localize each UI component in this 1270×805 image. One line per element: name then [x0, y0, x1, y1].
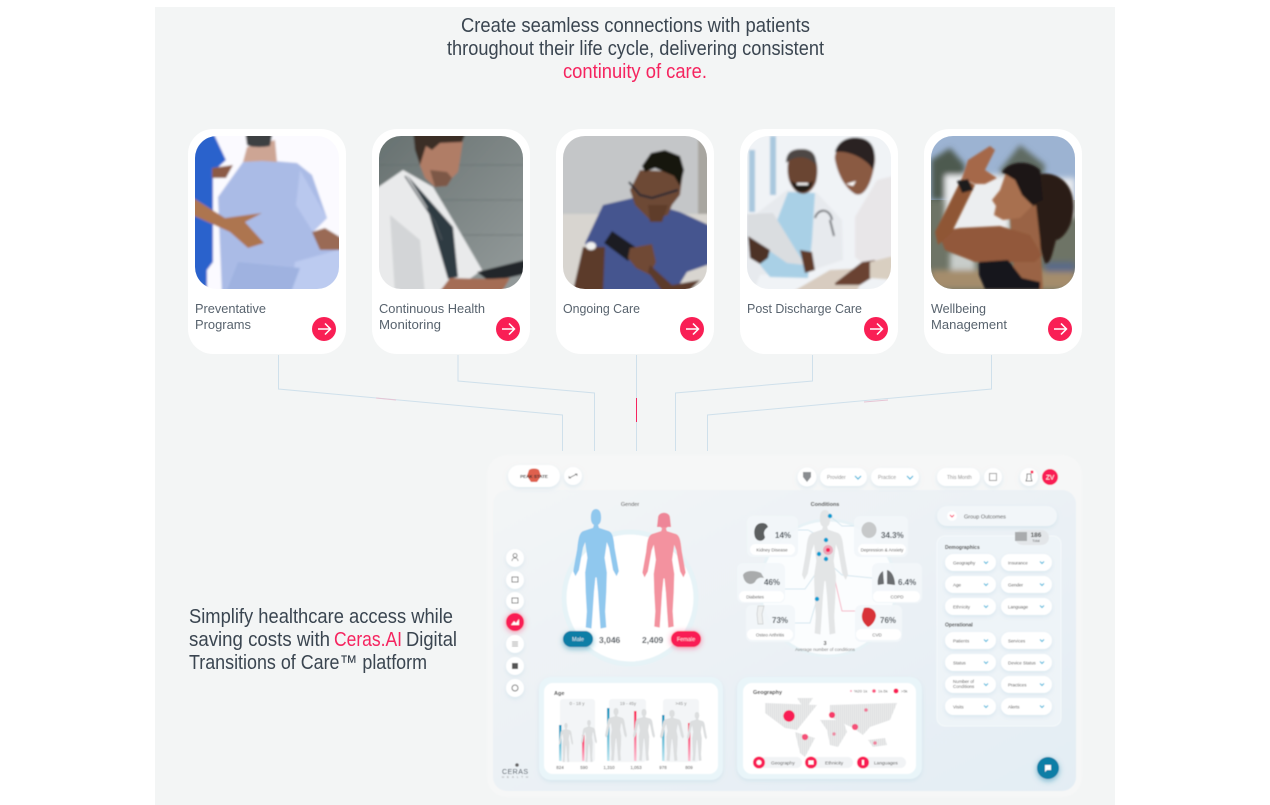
age values: 590: [580, 765, 588, 770]
COPD: [873, 570, 920, 602]
COPD: COPD: [890, 594, 904, 600]
card: ongoing care: [556, 129, 714, 354]
depression and anxiety: Depression & Anxiety: [861, 548, 904, 552]
age chart panel: 19 - 45y: [620, 701, 637, 706]
conditions chart: [737, 502, 922, 656]
average conditions: 3: [823, 641, 827, 647]
CVD: [856, 607, 901, 640]
filter labels: Visits: [953, 704, 964, 710]
heading: Create seamless connections with patients: [461, 15, 810, 37]
age values: 809: [685, 765, 693, 770]
filter labels: Services: [1008, 638, 1026, 644]
label: Management: [931, 317, 1007, 332]
CVD: 76%: [880, 616, 896, 625]
map bubbles: [783, 708, 877, 745]
connector traces: [785, 516, 872, 623]
label: Wellbeing: [931, 301, 986, 316]
marker dots: [815, 514, 833, 601]
gender chart: [563, 502, 701, 664]
filter labels: [953, 560, 1037, 710]
world map: [765, 698, 897, 757]
label: Monitoring: [379, 317, 441, 332]
card: continuous health monitoring: [372, 129, 530, 354]
top bar: [508, 465, 1058, 487]
intro text: Transitions of Care™ platform: [189, 652, 427, 674]
callout cards: [737, 516, 922, 642]
heading: [447, 15, 824, 83]
age chart panel: Age: [554, 691, 564, 697]
legend: >5k: [901, 688, 908, 694]
gender chart: Gender: [621, 502, 639, 508]
depression and anxiety: 34.3%: [881, 531, 904, 540]
filter labels: Status: [953, 660, 967, 666]
arrow button: [1048, 317, 1072, 341]
filter labels: Language: [1008, 604, 1029, 610]
osteoarthritis: Osteo Arthritis: [756, 632, 785, 638]
age values: 1,310: [603, 765, 615, 770]
map tabs: Geography: [771, 760, 795, 766]
female button and value: 2,409: [642, 635, 664, 645]
diabetes: [739, 571, 784, 602]
body figure: [802, 510, 848, 634]
intro text: [189, 606, 457, 674]
filter labels: Number of: [953, 679, 975, 684]
age values: 978: [659, 765, 667, 770]
top bar: ZV: [1046, 474, 1055, 482]
legend: [850, 688, 908, 694]
legend: %20 1k: [854, 688, 867, 694]
intro text: saving costs with: [189, 629, 330, 651]
average conditions: Average number of conditions: [795, 647, 856, 652]
legend: 1k-5k: [878, 688, 888, 694]
depression and anxiety: [858, 522, 906, 555]
total tag: [1015, 530, 1049, 545]
gender chart: Male: [572, 637, 584, 643]
filters panel: [937, 530, 1061, 726]
label: Ongoing Care: [563, 301, 640, 316]
intro text: Digital: [406, 629, 457, 651]
filters panel: Demographics: [945, 545, 980, 551]
filter labels: Gender: [1008, 582, 1024, 588]
card: post discharge care: [740, 129, 898, 354]
filter labels: Device Status: [1008, 660, 1037, 666]
age values: 1,053: [630, 765, 642, 770]
Ceras Health logo: CERAS: [502, 769, 528, 776]
total tag: 186: [1031, 532, 1042, 539]
card: wellbeing management: [924, 129, 1082, 354]
average conditions: [795, 641, 856, 652]
age chart panel: >45 y: [675, 701, 687, 706]
label: Programs: [195, 317, 251, 332]
label: Preventative: [195, 301, 266, 316]
Ceras Health logo: [502, 763, 528, 779]
map tabs: Languages: [874, 760, 898, 766]
COPD: 6.4%: [898, 578, 916, 587]
heading: continuity of care.: [563, 61, 707, 83]
photo: doctor and patient with tablet: [747, 136, 891, 289]
group outcomes header: [937, 506, 1057, 526]
chat button: [1037, 757, 1059, 779]
top bar: PEAK STATE: [520, 474, 548, 479]
male button and value: [563, 631, 593, 647]
intro text: Simplify healthcare access while: [189, 606, 453, 628]
heading: throughout their life cycle, delivering consistent: [447, 38, 824, 60]
filter chevrons: [984, 562, 1044, 708]
gender chart: 3,046: [599, 635, 621, 645]
arrow button: [312, 317, 336, 341]
age chart panel: [539, 677, 723, 780]
age values: [556, 765, 693, 770]
conditions chart: Conditions: [811, 502, 839, 508]
age values: 824: [556, 765, 564, 770]
diabetes: 46%: [764, 578, 780, 587]
female figure: [642, 513, 686, 628]
age figures: [559, 708, 707, 762]
osteoarthritis: [747, 606, 793, 640]
arrow button: [864, 317, 888, 341]
dashboard mockup: [487, 455, 1082, 797]
geography map panel: Geography: [753, 690, 783, 696]
filter labels: Alerts: [1008, 704, 1020, 710]
top bar: Practice: [878, 475, 896, 481]
filter labels: Conditions: [953, 684, 975, 689]
filter labels: Ethnicity: [953, 604, 971, 610]
arrow button: [496, 317, 520, 341]
geography map panel: [737, 677, 922, 779]
male figure: [573, 509, 619, 629]
filter labels: Practices: [1008, 682, 1027, 688]
total tag: Total: [1032, 539, 1040, 543]
kidney disease: [750, 523, 795, 555]
page canvas: [155, 7, 1115, 805]
Ceras Health logo: HEALTH: [502, 775, 528, 779]
side navigation: [506, 549, 524, 697]
arrow button: [680, 317, 704, 341]
photo: doctor with tablet: [379, 136, 523, 289]
label: [195, 301, 266, 332]
photo: nurse examining patient's back: [195, 136, 339, 289]
filter labels: Insurance: [1008, 560, 1028, 566]
gender chart: Female: [677, 637, 695, 643]
top bar: This Month: [947, 475, 972, 481]
age chart panel: 0 - 18 y: [569, 701, 585, 706]
label: Post Discharge Care: [747, 301, 862, 316]
diabetes: Diabetes: [746, 594, 765, 600]
filter labels: Patients: [953, 638, 970, 644]
CVD: CVD: [872, 632, 882, 638]
map tabs: Ethnicity: [825, 760, 844, 766]
intro text: Ceras.AI: [334, 629, 402, 651]
filters panel: Operational: [945, 622, 973, 628]
filter labels: Geography: [953, 560, 976, 566]
age bars: [559, 725, 562, 761]
photo: man checking glucose sensor: [563, 136, 707, 289]
group outcomes header: Group Outcomes: [964, 514, 1006, 520]
label: [379, 301, 485, 332]
kidney disease: Kidney Disease: [756, 548, 788, 552]
connector lines from cards to dashboard: [278, 355, 992, 451]
card: preventative programs: [188, 129, 346, 354]
osteoarthritis: 73%: [772, 616, 788, 625]
top bar: Provider: [827, 475, 846, 481]
label: Continuous Health: [379, 301, 485, 316]
photo: woman in yoga pose: [931, 136, 1075, 289]
filter labels: Age: [953, 582, 962, 588]
background panel: [155, 7, 1115, 805]
label: [931, 301, 1007, 332]
filter pills: [945, 554, 1052, 715]
kidney disease: 14%: [775, 531, 791, 540]
map tabs: [753, 756, 906, 768]
